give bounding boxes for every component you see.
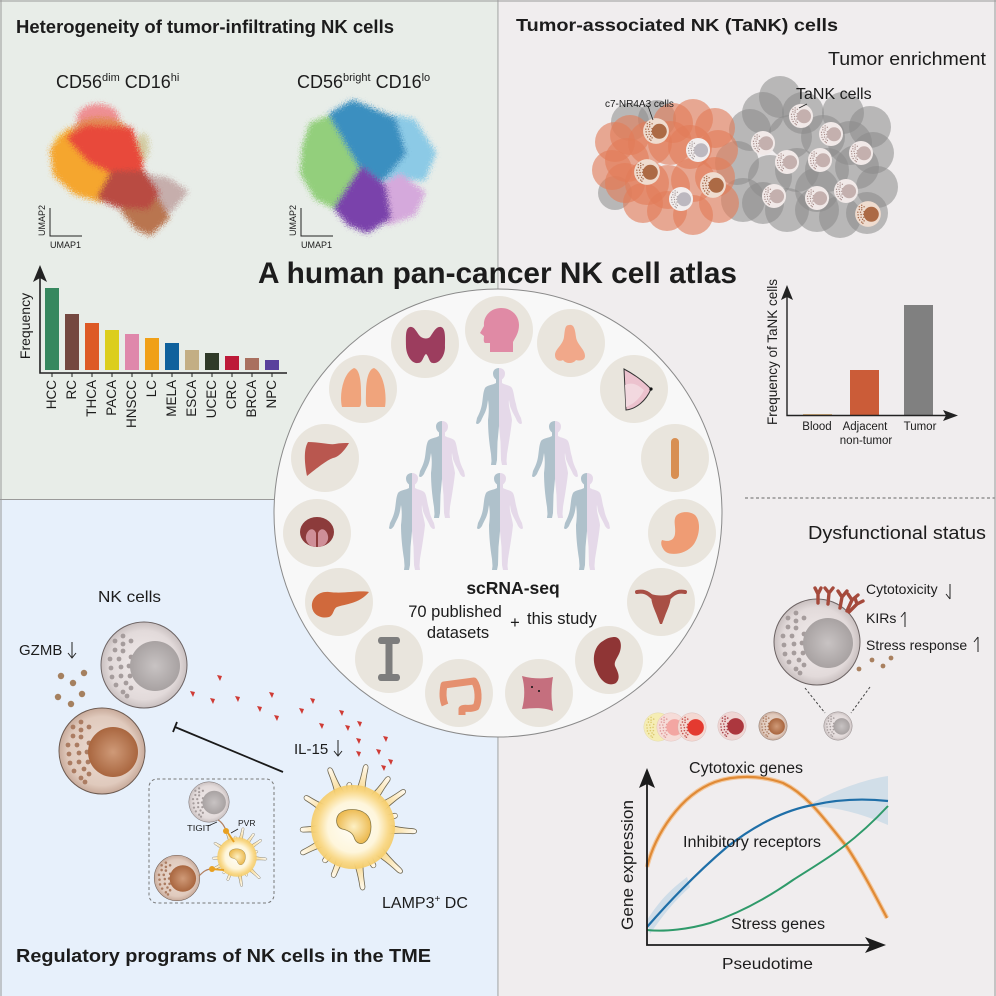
bar chart: frequency by cancer type: Frequency: [17, 293, 33, 359]
bar chart: frequency by cancer type: MELA: [164, 380, 179, 417]
label: CD56bright CD16lo: bright: [343, 72, 371, 84]
label: CD56dim CD16hi: hi: [171, 72, 179, 84]
label: CD56dim CD16hi: CD56: [56, 72, 102, 92]
subheading: tumor enrichment: Tumor enrichment: [828, 49, 986, 69]
text: data sources: this study: [527, 610, 597, 628]
icon: skin: [522, 676, 553, 711]
text: data sources: [408, 603, 597, 642]
icon: UMAP axes left: UMAP1: [50, 240, 81, 250]
icon: pancreas: [312, 591, 369, 618]
label: LAMP3+ DC: +: [434, 894, 440, 905]
bar chart: frequency of TaNK cells: Blood: [802, 421, 832, 433]
text: cytotoxicity down, KIRs up, stress response up: KIRs: [866, 610, 896, 626]
icon: UMAP axes left: UMAP2: [37, 205, 47, 236]
bar chart: frequency of TaNK cells: Tumor: [904, 421, 937, 433]
label: CD56bright CD16lo: CD56: [297, 72, 343, 92]
illustration: NK cells: [55, 622, 187, 794]
main title: A human pan-cancer NK cell atlas: [258, 257, 737, 290]
chart: UMAP of CD56bright CD16lo clusters: [303, 103, 433, 230]
bar chart: frequency by cancer type: THCA: [84, 380, 99, 417]
label: TaNK cells: TaNK cells: [796, 86, 872, 103]
axis label: gene expression: Gene expression: [619, 800, 637, 930]
icon: breast: [624, 369, 653, 410]
icon: UMAP axes right: UMAP1: [301, 240, 332, 250]
label: CD56bright CD16lo: CD16: [371, 72, 422, 92]
inset: TIGIT PVR interaction: PVR: [238, 818, 255, 828]
text: cytotoxicity down, KIRs up, stress response up: Cytotoxicity: [866, 581, 938, 597]
text: data sources: 70 published: [408, 603, 502, 621]
text: data sources: datasets: [427, 624, 489, 642]
icon: kidney: [594, 637, 621, 684]
heading: TaNK cells: Tumor-associated NK (TaNK) cells: [516, 15, 838, 35]
central circle: organs and scRNA-seq: [274, 289, 722, 737]
icon: uterus: [637, 592, 685, 624]
heading: heterogeneity: Heterogeneity of tumor-infiltrating NK cells: [16, 16, 394, 37]
bar chart: frequency by cancer type: RC: [64, 380, 79, 400]
label: CD56bright CD16lo: lo: [422, 72, 430, 84]
bar chart: frequency of TaNK cells: Adjacent: [843, 421, 888, 433]
bar chart: frequency by cancer type: UCEC: [204, 380, 219, 418]
label: IL-15 down: [294, 740, 342, 758]
icon: bone: [378, 637, 400, 681]
arrow: inhibition: [173, 722, 283, 772]
bar chart: frequency by cancer type: CRC: [224, 380, 239, 409]
label: stress genes: Stress genes: [731, 916, 825, 933]
label: IL-15 down: IL-15: [294, 741, 328, 758]
panel: regulatory programs of NK cells in the TME: [0, 500, 498, 996]
label: NK cells: NK cells: [98, 589, 161, 606]
icon: prostate: [300, 517, 334, 547]
icon: IL-15 particles: [190, 675, 393, 771]
bar chart: frequency by cancer type: LC: [144, 380, 159, 397]
icon: nose: [555, 325, 585, 363]
bar chart: frequency by cancer type: HCC: [44, 380, 59, 409]
illustration: LAMP3+ DC: [298, 763, 417, 891]
bar chart: frequency of TaNK cells: non-tumor: [840, 435, 892, 447]
bar chart: frequency of TaNK cells: [765, 279, 958, 447]
text: cytotoxicity down, KIRs up, stress response up: Stress response: [866, 637, 967, 653]
text: cytotoxicity down, KIRs up, stress response up: [866, 581, 978, 653]
label: LAMP3+ DC: LAMP3: [382, 895, 434, 912]
label: LAMP3+ DC: DC: [440, 895, 468, 912]
chart: UMAP of CD56dim CD16hi clusters: [53, 104, 185, 233]
label: GZMB down: GZMB: [19, 642, 62, 659]
bar chart: frequency by cancer type: PACA: [104, 380, 119, 416]
panel: tumor-associated NK cells: [499, 0, 996, 499]
icon: colon: [443, 681, 478, 715]
icon: human figures: [389, 368, 610, 570]
label: c7-NR4A3 cells: c7-NR4A3 cells: [605, 99, 674, 110]
panel: dysfunctional status: [499, 498, 996, 996]
panel: heterogeneity of tumor-infiltrating NK cells: [0, 0, 498, 499]
inset: TIGIT PVR interaction: [149, 779, 274, 903]
bar chart: frequency of TaNK cells: Frequency of TaNK cells: [765, 279, 780, 425]
bar chart: frequency by cancer type: HNSCC: [124, 380, 139, 428]
label: scRNA-seq: scRNA-seq: [466, 578, 560, 598]
icon: UMAP axes right: [288, 205, 333, 250]
icon: head: [480, 308, 519, 352]
icon row: NK cell trajectory: [644, 712, 852, 741]
icon: stomach: [661, 512, 699, 554]
axis label: pseudotime: Pseudotime: [722, 956, 813, 973]
icon: UMAP axes right: UMAP2: [288, 205, 298, 236]
heading: regulatory programs: Regulatory programs of NK cells in the TME: [16, 945, 431, 966]
text: data sources: +: [510, 614, 520, 632]
bar chart: frequency by cancer type: [17, 265, 287, 428]
illustration: exhausted NK cell: [774, 588, 893, 713]
inset: TIGIT PVR interaction: TIGIT: [187, 823, 211, 833]
label: cytotoxic genes: Cytotoxic genes: [689, 760, 803, 777]
bar chart: frequency by cancer type: NPC: [264, 380, 279, 409]
icon: lungs: [341, 368, 386, 407]
label: CD56dim CD16hi: dim: [102, 72, 120, 84]
bar chart: frequency by cancer type: BRCA: [244, 380, 259, 418]
label: inhibitory receptors: Inhibitory receptors: [683, 834, 821, 851]
line chart: gene expression over pseudotime: [619, 760, 888, 973]
subheading: dysfunctional status: Dysfunctional status: [808, 523, 986, 543]
illustration: tumor enrichment cell clusters: [592, 76, 898, 238]
icon: liver: [305, 442, 349, 476]
icon: thyroid: [406, 327, 445, 363]
bar chart: frequency by cancer type: ESCA: [184, 380, 199, 417]
icon: esophagus: [671, 438, 679, 479]
label: CD56dim CD16hi: CD16: [120, 72, 171, 92]
icon: UMAP axes left: [37, 205, 82, 250]
